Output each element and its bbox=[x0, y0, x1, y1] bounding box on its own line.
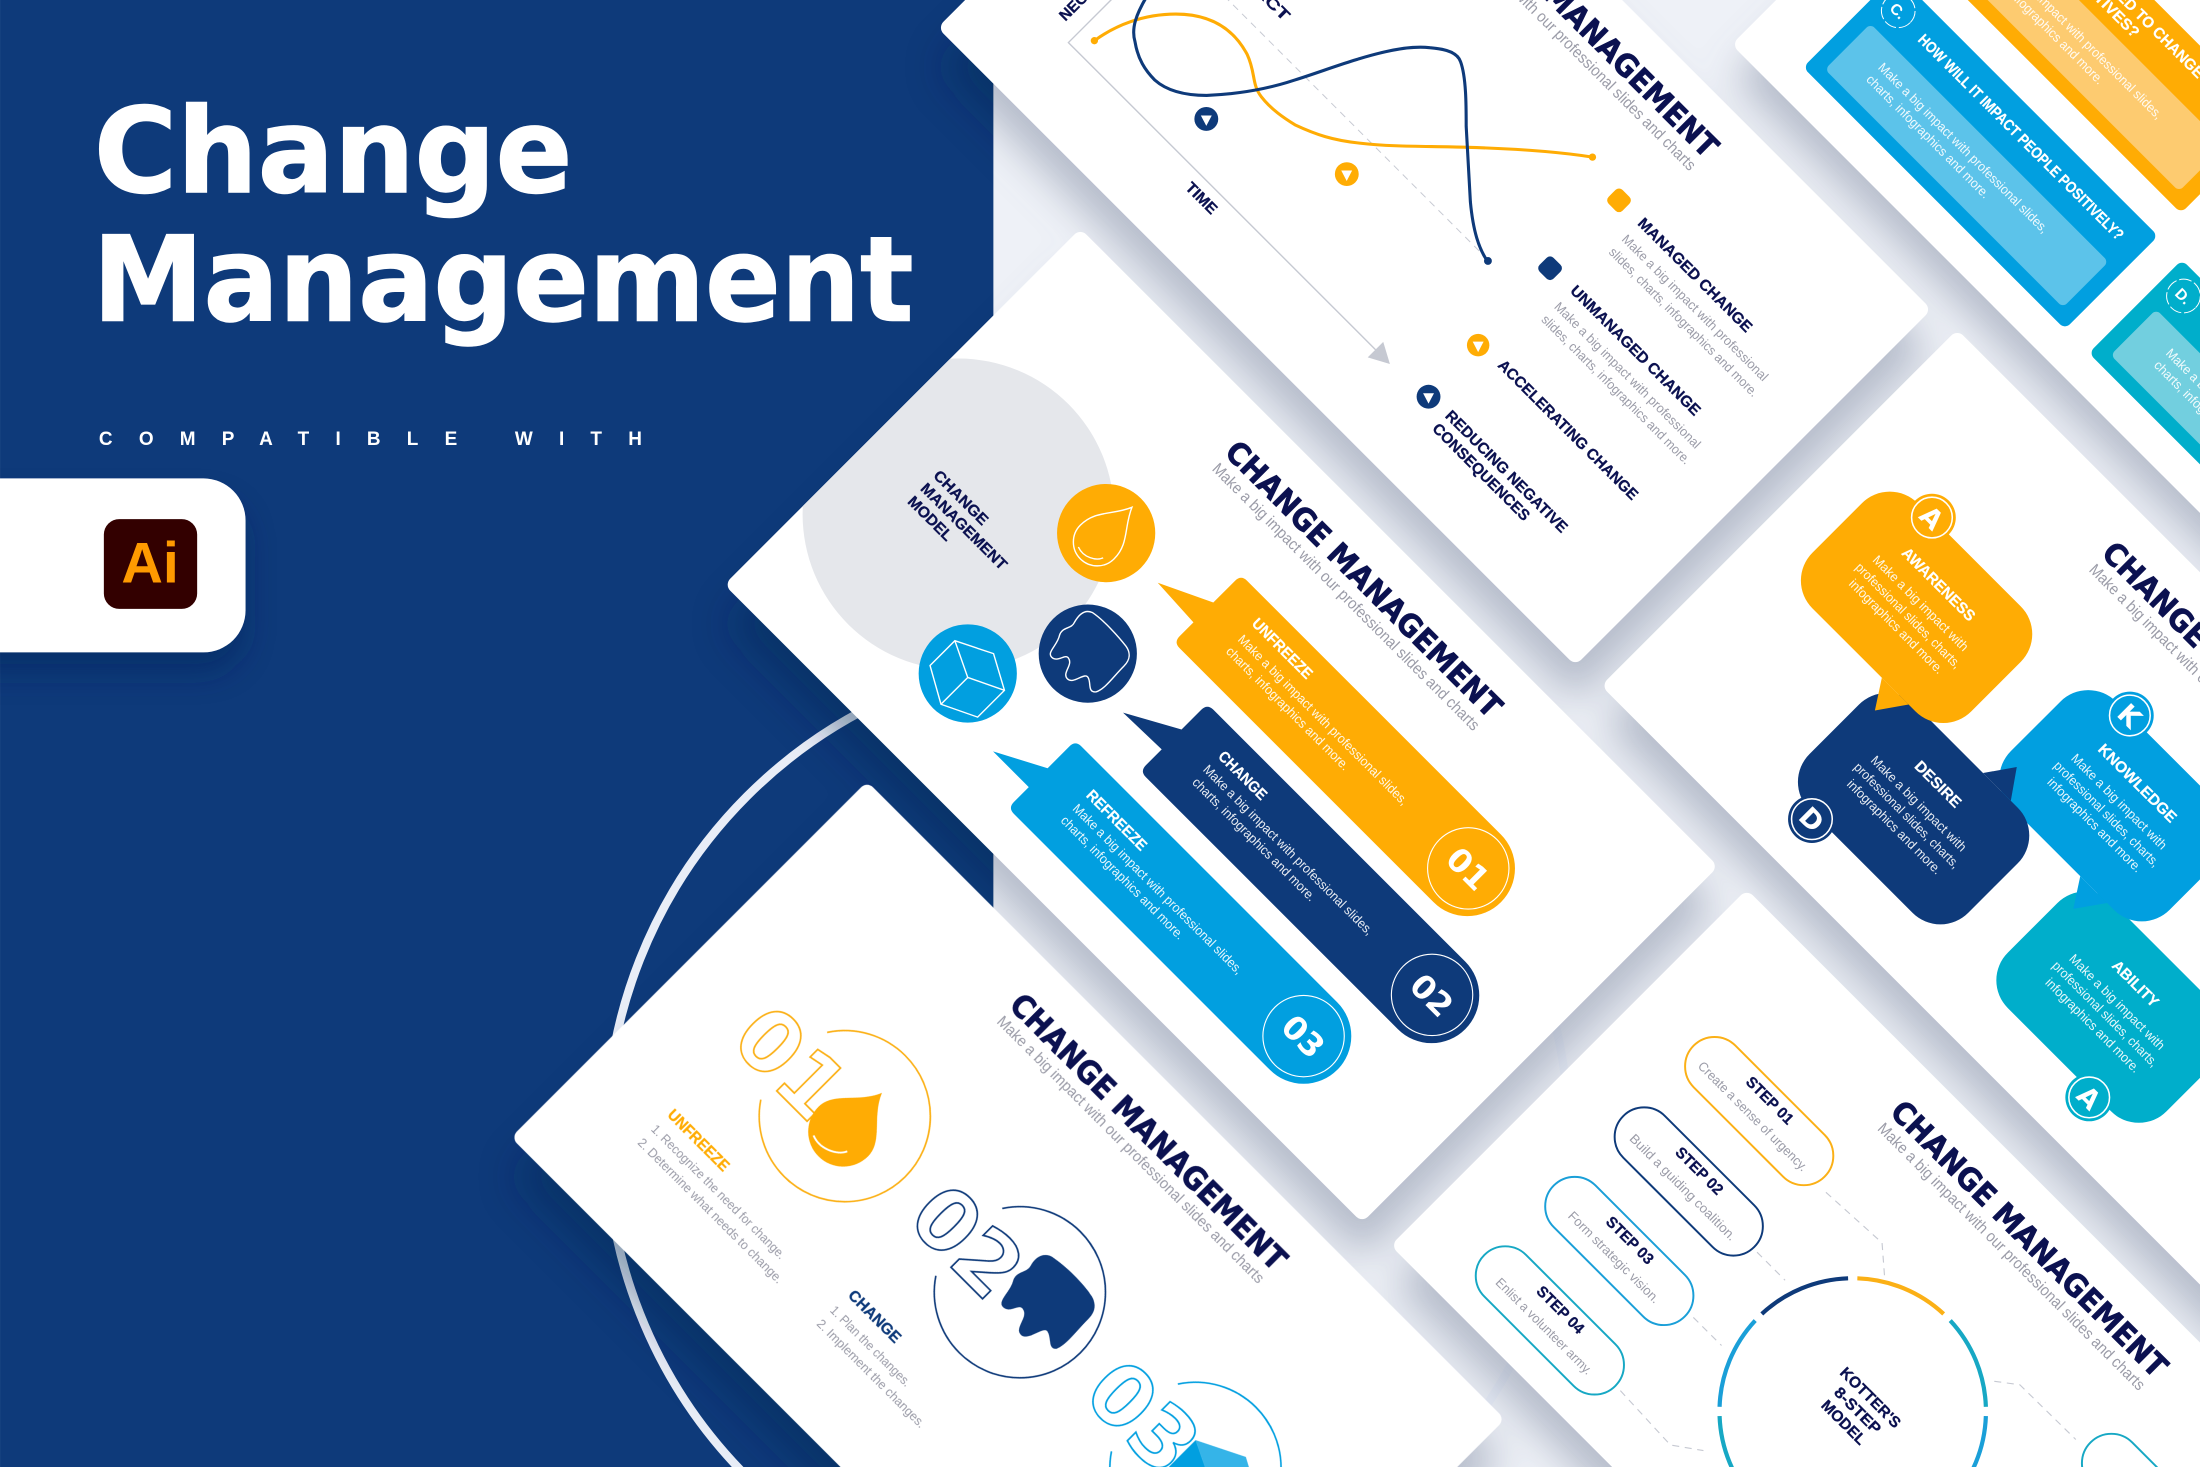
model label: CHANGE bbox=[930, 467, 991, 529]
slide title: CHANGE MANAGEMENT bbox=[1883, 1094, 2174, 1385]
block: blue question C: HOW WILL IT IMPACT PEOPLE POSITIVELY? bbox=[1914, 31, 2127, 244]
step 01: unfreeze drop: 01 bbox=[714, 987, 866, 1139]
marker: accelerating change bbox=[1330, 157, 1364, 191]
slide shadows on light background bbox=[993, 50, 2200, 1467]
legend: reducing negative consequences: CONSEQUENCES bbox=[1429, 420, 1533, 525]
legend: reducing negative consequences: REDUCING NEGATIVE bbox=[1442, 407, 1571, 536]
white software tab bbox=[0, 478, 246, 652]
step 02 text: 1. Plan the changes. bbox=[827, 1303, 914, 1390]
bubble: awareness: Make a big impact with bbox=[1870, 552, 1972, 654]
Kotter ring and connectors bbox=[1620, 1192, 2076, 1467]
callout: change: charts, infographics and more. bbox=[1189, 775, 1319, 904]
legend: managed change: MANAGED CHANGE bbox=[1634, 215, 1755, 336]
step 02 pill: STEP 02 bbox=[1672, 1144, 1726, 1199]
icon: Adobe Illustrator: Ai bbox=[121, 531, 179, 595]
heading: Management bbox=[93, 212, 913, 349]
legend: unmanaged change: UNMANAGED CHANGE bbox=[1567, 282, 1704, 419]
curve end dots bbox=[1091, 37, 1596, 265]
slide title: Make a big impact with our professional slides and charts bbox=[993, 1012, 1268, 1287]
legend: unmanaged change: Make a big impact with professional bbox=[1551, 299, 1704, 451]
bubble: knowledge: KNOWLEDGE bbox=[2094, 741, 2180, 826]
step 04 pill: STEP 04 bbox=[1533, 1283, 1588, 1338]
callout: unfreeze: charts, infographics and more. bbox=[1223, 644, 1353, 773]
legend: managed change bbox=[1578, 186, 1792, 400]
ring arcs: teal and blue bbox=[1720, 1321, 1986, 1467]
step 03 pill: Form strategic vision. bbox=[1565, 1208, 1663, 1306]
legend: unmanaged change bbox=[1510, 254, 1723, 467]
legend: managed change: slides, charts, infographics and more. bbox=[1606, 244, 1761, 400]
icon: Adobe Illustrator bbox=[104, 519, 197, 609]
step 02 text: CHANGE bbox=[844, 1287, 904, 1347]
bubble: awareness: AWARENESS bbox=[1898, 545, 1978, 625]
callout: change: Make a big impact with professional slides, bbox=[1200, 762, 1377, 938]
callout: change bbox=[1123, 706, 1480, 1044]
callout: unfreeze bbox=[1158, 578, 1515, 916]
slide shadows on navy panel bbox=[524, 48, 994, 1467]
bubble: awareness: professional slides, charts, bbox=[1852, 560, 1964, 671]
callout: refreeze: Make a big impact with professional slides, bbox=[1070, 801, 1246, 977]
navy left panel bbox=[0, 0, 993, 1467]
curve: unmanaged change bbox=[1134, 0, 1487, 261]
axis labels bbox=[1019, 0, 1353, 218]
bubble: knowledge bbox=[2000, 690, 2200, 922]
step 02: change blob bbox=[866, 1139, 1141, 1413]
slide title: Make a big impact with our professional slides and charts bbox=[1208, 460, 1483, 734]
model label: MODEL bbox=[904, 493, 956, 545]
bubble: desire: professional slides, charts, bbox=[1851, 760, 1963, 871]
slide: change curves (top centre) bbox=[937, 0, 1932, 666]
block: orange question bbox=[1968, 0, 2200, 210]
slide: three step model (bottom left) bbox=[511, 781, 1505, 1467]
bubble: awareness: infographics and more. bbox=[1846, 576, 1947, 677]
chart axes bbox=[1061, 0, 1685, 370]
step 05 pill bbox=[2070, 1422, 2200, 1467]
bubble: desire: D bbox=[1792, 801, 1830, 839]
heading bbox=[93, 83, 913, 349]
decorative ring bbox=[606, 655, 1569, 1467]
step 03 pill: STEP 03 bbox=[1602, 1213, 1657, 1268]
legend: unmanaged change: slides, charts, infographics and more. bbox=[1539, 312, 1694, 467]
step 02 pill bbox=[1614, 1106, 1764, 1257]
callout: refreeze: charts, infographics and more. bbox=[1058, 813, 1188, 942]
Kotter model label: MODEL bbox=[1817, 1397, 1869, 1449]
step 02 pill: Build a guiding coalition. bbox=[1627, 1131, 1739, 1244]
block: blue question C: Make a big impact with professional slides, bbox=[1875, 60, 2052, 236]
step 01 pill: STEP 01 bbox=[1742, 1074, 1797, 1129]
bubble: desire bbox=[1788, 694, 2030, 924]
bubble: ability: Make a big impact with bbox=[2066, 951, 2168, 1053]
bubble: knowledge: K bbox=[2111, 698, 2148, 736]
slide: question blocks (top right) bbox=[1735, 0, 2200, 513]
bubble: desire: DESIRE bbox=[1911, 758, 1964, 812]
slide: Kotter's 8-step model (bottom right) bbox=[1391, 889, 2200, 1467]
step 02 text bbox=[814, 1286, 959, 1431]
icon: ice cube bbox=[918, 624, 1017, 723]
callout: unfreeze: 01 bbox=[1438, 840, 1497, 898]
bubble: ability: infographics and more. bbox=[2042, 975, 2143, 1076]
bubble: awareness bbox=[1800, 492, 2032, 723]
callout: change: CHANGE bbox=[1214, 748, 1270, 804]
dashed connectors bbox=[1620, 1192, 2076, 1451]
bubble: ability: professional slides, charts, bbox=[2049, 958, 2161, 1070]
slide title: CHANGE MANAGEMENT bbox=[1002, 987, 1294, 1278]
bubble: ability: A bbox=[2070, 1080, 2107, 1117]
block: teal question D: D. bbox=[2171, 285, 2194, 308]
icon: melting blob bbox=[1038, 604, 1137, 703]
heading: Change bbox=[94, 83, 572, 220]
step 04 pill: Enlist a volunteer army. bbox=[1493, 1275, 1596, 1378]
icon: water drop bbox=[1057, 484, 1156, 582]
model label: MANAGEMENT bbox=[917, 480, 1011, 574]
bubble: knowledge: Make a big impact with bbox=[2068, 751, 2170, 853]
bubble: ability bbox=[1996, 892, 2200, 1123]
legend: accelerating change: ACCELERATING CHANGE bbox=[1494, 357, 1641, 504]
ring arc: navy bbox=[1762, 1278, 1848, 1314]
step 02: change blob: 02 bbox=[891, 1166, 1043, 1318]
step 02 text: 2. Implement the changes. bbox=[814, 1316, 929, 1431]
callout: refreeze bbox=[993, 743, 1352, 1084]
step 01: unfreeze drop bbox=[689, 961, 966, 1237]
bubble: desire: infographics and more. bbox=[1844, 776, 1945, 877]
slide title bbox=[2089, 544, 2200, 682]
legend: reducing negative consequences bbox=[1402, 380, 1572, 549]
grey model circle bbox=[802, 358, 1111, 665]
bubble: desire: Make a big impact with bbox=[1868, 753, 1970, 854]
callout: refreeze: 03 bbox=[1274, 1007, 1332, 1066]
bubble: ability: ABILITY bbox=[2108, 957, 2162, 1011]
chart curves bbox=[1091, 0, 1596, 265]
callout: unfreeze: UNFREEZE bbox=[1248, 615, 1316, 683]
slide title: CHANGE MANAGEMENT bbox=[1218, 434, 1509, 725]
curve: managed change bbox=[1094, 14, 1592, 157]
Kotter model label bbox=[1810, 1364, 1904, 1458]
step 01 text: UNFREEZE bbox=[664, 1106, 732, 1175]
legend: managed change: Make a big impact with professional bbox=[1619, 232, 1771, 384]
step 01 text: 1. Recognize the need for change. bbox=[648, 1122, 789, 1262]
step 04 pill bbox=[1474, 1245, 1625, 1396]
tab shadow bbox=[0, 499, 246, 673]
marker: reducing negative consequences bbox=[1189, 102, 1223, 136]
Kotter model label: KOTTER'S bbox=[1836, 1364, 1904, 1432]
step 03 pill bbox=[1544, 1176, 1694, 1326]
block: teal question D bbox=[2092, 262, 2200, 464]
Kotter model label: 8-STEP bbox=[1830, 1384, 1884, 1438]
legend: accelerating change bbox=[1462, 329, 1641, 508]
bubble: knowledge: infographics and more. bbox=[2044, 774, 2145, 875]
bubble: awareness: A bbox=[1913, 500, 1950, 537]
slide title: Make a big impact with our professional slides and charts bbox=[1874, 1120, 2149, 1394]
bubble: knowledge: professional slides, charts, bbox=[2051, 758, 2163, 870]
callout: refreeze: REFREEZE bbox=[1082, 787, 1150, 854]
block: blue question C: C. bbox=[1886, 0, 1909, 23]
step 03: refreeze cube bbox=[1042, 1314, 1317, 1467]
step 01 pill: Create a sense of urgency. bbox=[1695, 1058, 1811, 1174]
slide: ADKAR model (right) bbox=[1601, 330, 2200, 1324]
callout: change: 02 bbox=[1402, 966, 1461, 1025]
ring arc: orange bbox=[1857, 1278, 1944, 1314]
slide: change management model (centre) bbox=[696, 200, 1718, 1223]
axis labels: TIME bbox=[1182, 179, 1220, 218]
block: blue question C bbox=[1803, 0, 2158, 329]
block: blue question C: charts, infographics and more. bbox=[1863, 72, 1993, 201]
step 01 text: 2. Determine what needs to change. bbox=[635, 1135, 786, 1286]
callout: unfreeze: Make a big impact with professional slides, bbox=[1235, 632, 1411, 808]
compatible with label: COMPATIBLE WITH bbox=[99, 429, 642, 450]
step 01 pill bbox=[1684, 1036, 1834, 1186]
